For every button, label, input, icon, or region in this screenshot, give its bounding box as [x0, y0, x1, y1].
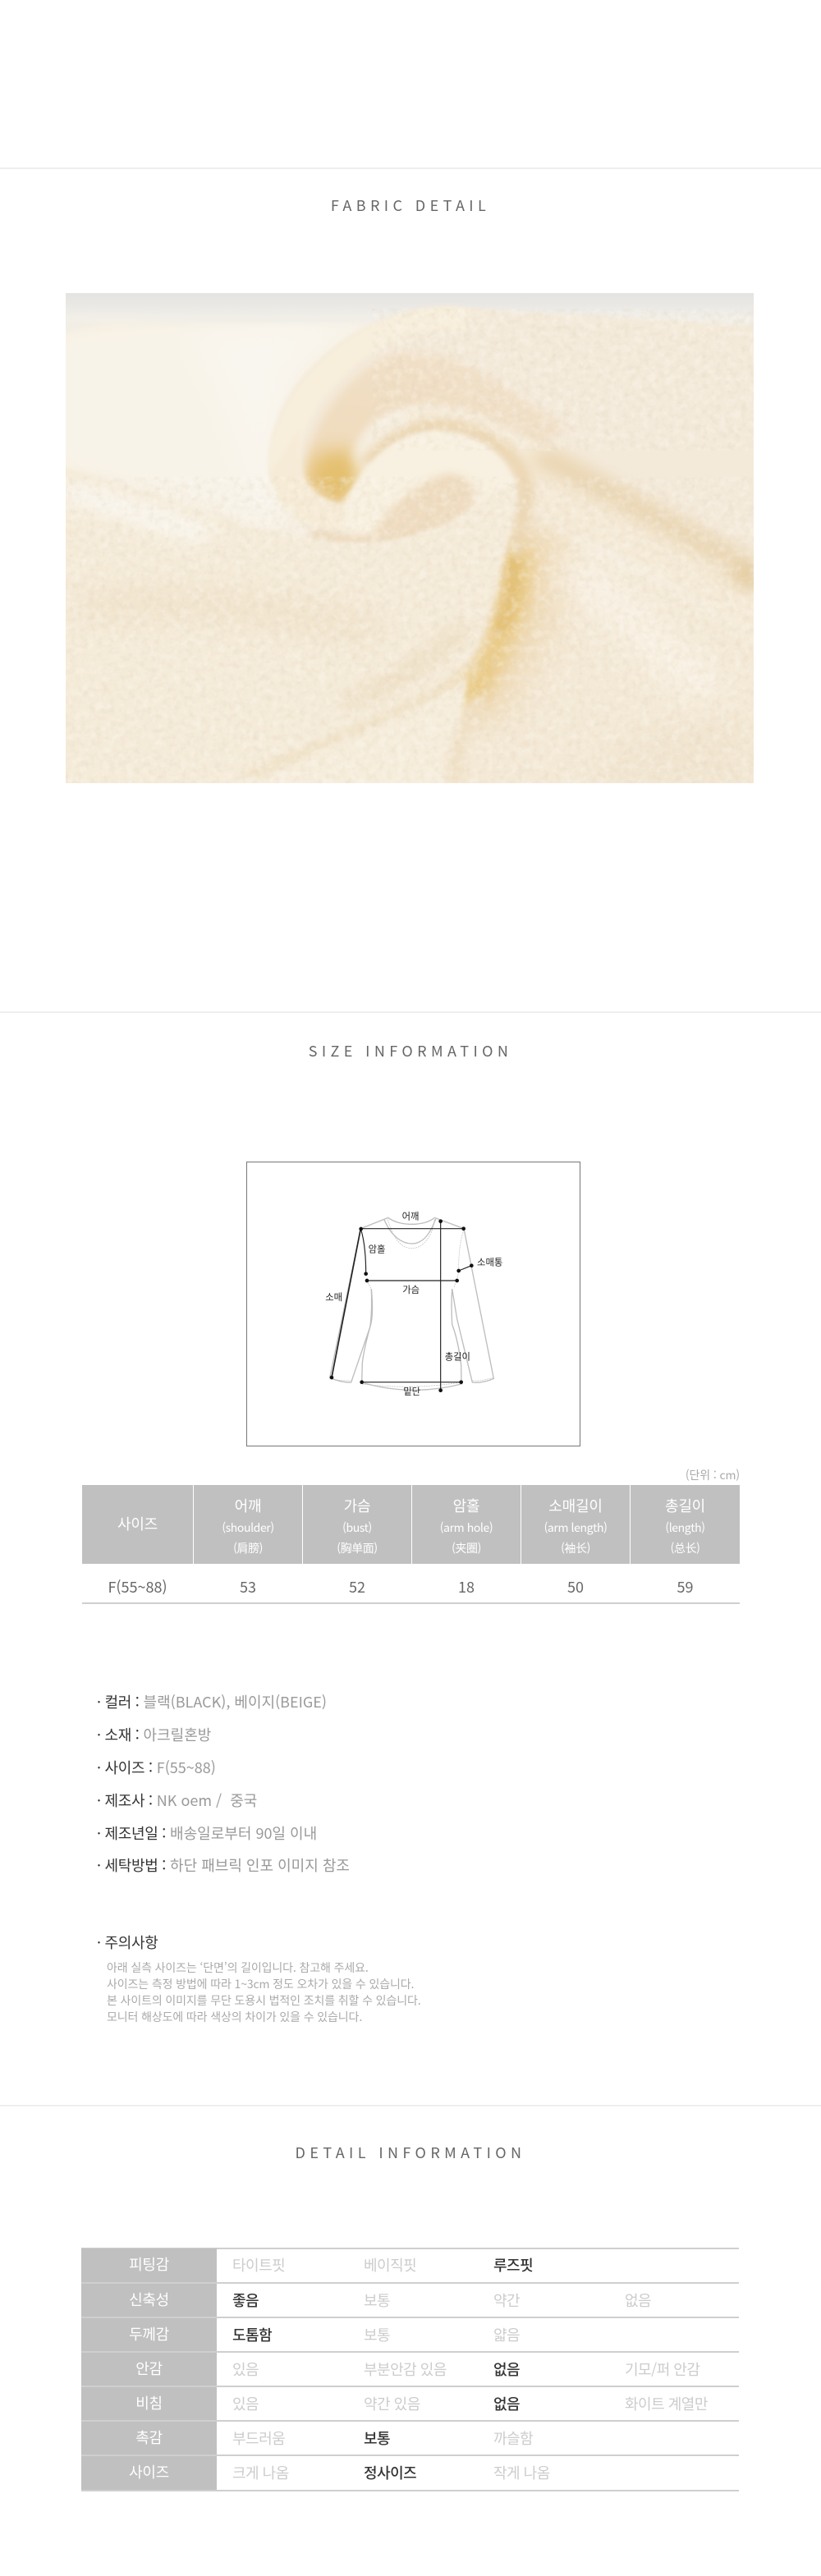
header: shoulder	[194, 1485, 302, 1564]
measurement lines	[332, 1222, 471, 1391]
measurement labels: 어깨	[402, 1210, 419, 1223]
product specification list: ·	[97, 1790, 101, 1811]
row: lining: 부분안감 있음	[364, 2358, 447, 2380]
header: length: (length)	[665, 1519, 705, 1536]
row: sizing: 사이즈	[129, 2461, 169, 2482]
cautions text	[107, 1960, 421, 2025]
header: arm hole: 암홀	[453, 1495, 479, 1516]
header: arm length: (arm length)	[544, 1519, 607, 1536]
shadow around the inner curl	[368, 424, 525, 556]
header: arm hole	[412, 1485, 521, 1564]
header: size: 사이즈	[117, 1513, 158, 1534]
header: arm hole: (夹圈)	[452, 1540, 481, 1556]
photo: swirled cream knit fabric	[66, 293, 754, 783]
header: size	[82, 1485, 193, 1564]
yellow core shadow	[466, 543, 519, 704]
product specification list: ·	[97, 1822, 101, 1844]
product specification list: 소재 : 아크릴혼방	[105, 1724, 211, 1745]
row: fit	[81, 2248, 533, 2282]
row: sheerness: 있음	[232, 2393, 259, 2414]
garment outline	[330, 1217, 493, 1390]
cautions text: 모니터 해상도에 따라 색상의 차이가 있을 수 있습니다.	[107, 2009, 362, 2025]
data row: F(55~88)	[108, 1576, 167, 1597]
row: stretch: 보통	[364, 2290, 390, 2311]
lower curl lip	[271, 473, 343, 528]
hollow of the swirl	[305, 352, 566, 506]
row: stretch	[81, 2284, 651, 2317]
heading: fabric detail: FABRIC DETAIL	[331, 195, 490, 216]
header: bust	[303, 1485, 411, 1564]
row: stretch: 신축성	[129, 2289, 169, 2310]
second band behind the curl	[417, 413, 754, 624]
row: touch: 촉감	[135, 2427, 163, 2448]
lower left big fold	[66, 470, 511, 663]
product specification list: 세탁방법 : 하단 패브릭 인포 이미지 참조	[105, 1854, 350, 1876]
measurement labels: 소매통	[477, 1256, 502, 1269]
row: sizing: 작게 나옴	[493, 2462, 550, 2483]
row: sizing: 정사이즈	[364, 2462, 416, 2483]
row: fit: 베이직핏	[364, 2254, 416, 2276]
product specification list: 제조사 : NK oem / 중국	[105, 1790, 257, 1811]
row: touch: 까슬함	[493, 2427, 533, 2449]
row: thickness: 도톰함	[232, 2324, 272, 2345]
row: touch: 보통	[364, 2427, 390, 2449]
row: sizing	[81, 2456, 550, 2490]
row: stretch: 없음	[625, 2290, 651, 2311]
measurement labels	[325, 1210, 502, 1398]
panel: size information section	[0, 1011, 821, 2025]
shadow beneath upper fold	[539, 454, 759, 575]
row: thickness: 두께감	[129, 2323, 169, 2345]
header: arm hole: (arm hole)	[440, 1519, 493, 1536]
row: stretch: 약간	[493, 2290, 520, 2311]
data row	[82, 1576, 740, 1604]
row: sheerness: 비침	[135, 2392, 163, 2413]
row: thickness	[81, 2318, 520, 2351]
heading: detail information: DETAIL INFORMATION	[296, 2142, 525, 2163]
header: bust: (胸单面)	[337, 1540, 378, 1556]
product specification list: 제조년일 : 배송일로부터 90일 이내	[105, 1822, 317, 1844]
panel: detail information section	[0, 2105, 821, 2491]
bottom centre fold	[440, 678, 469, 721]
data row: 53	[240, 1576, 256, 1597]
diagram frame	[246, 1162, 580, 1446]
back left blurred cloth	[67, 348, 71, 452]
row: fit: 타이트핏	[232, 2254, 285, 2276]
inner curl	[345, 430, 514, 524]
header: arm length: (袖长)	[561, 1540, 590, 1556]
data row: 52	[349, 1576, 365, 1597]
header: shoulder: 어깨	[235, 1495, 261, 1516]
row: sheerness: 없음	[493, 2393, 520, 2414]
product specification list: ·	[97, 1691, 101, 1712]
header: shoulder: (肩膀)	[233, 1540, 263, 1556]
wide peach shadow right of the front fold	[469, 529, 536, 721]
row: stretch: 좋음	[232, 2290, 259, 2311]
measurement labels: 암홀	[369, 1243, 385, 1256]
upper right fold	[470, 309, 754, 333]
product specification list	[97, 1691, 350, 1876]
header: arm length: 소매길이	[548, 1495, 603, 1516]
light diagonal patch on right lower fold	[571, 562, 713, 694]
measurement labels: 총길이	[445, 1350, 470, 1363]
row: lining: 기모/퍼 안감	[625, 2358, 699, 2380]
row: lining: 있음	[232, 2358, 259, 2380]
row: sizing: 크게 나옴	[232, 2462, 289, 2483]
cautions text: 본 사이트의 이미지를 무단 도용시 법적인 조치를 취할 수 있습니다.	[107, 1992, 421, 2009]
row: lining: 안감	[135, 2358, 163, 2379]
product specification list: ·	[97, 1854, 101, 1876]
row: thickness: 보통	[364, 2324, 390, 2345]
top grey backdrop	[66, 293, 754, 315]
row: thickness: 얇음	[493, 2324, 520, 2345]
row: fit: 피팅감	[129, 2253, 169, 2275]
size table	[82, 1467, 740, 1604]
data row: 59	[677, 1576, 693, 1597]
cautions heading: 주의사항	[105, 1932, 158, 1953]
measurement labels: 가슴	[402, 1283, 420, 1296]
cautions heading: ·	[97, 1932, 101, 1953]
product specification list: ·	[97, 1724, 101, 1745]
header: length: 총길이	[665, 1495, 705, 1516]
panel: fabric detail section	[0, 167, 821, 783]
row: fit: 루즈핏	[493, 2254, 533, 2276]
row: lining: 없음	[493, 2358, 520, 2380]
row: sheerness	[81, 2387, 708, 2420]
measurement labels: 소매	[325, 1290, 342, 1304]
heading: size information: SIZE INFORMATION	[309, 1040, 512, 1061]
data row: 18	[458, 1576, 475, 1597]
product specification list: ·	[97, 1757, 101, 1778]
detail attribute table	[81, 2248, 739, 2491]
measurement labels: 밑단	[403, 1385, 421, 1398]
row: touch: 부드러움	[232, 2427, 285, 2449]
product specification list: 사이즈 : F(55~88)	[105, 1757, 216, 1778]
unit note: (단위 : cm)	[686, 1467, 740, 1483]
header: shoulder: (shoulder)	[222, 1519, 274, 1536]
measurement dots	[330, 1219, 474, 1392]
header: arm length	[521, 1485, 630, 1564]
header: bust: 가슴	[344, 1495, 370, 1516]
row: sheerness: 약간 있음	[364, 2393, 420, 2414]
diagram: garment measurement points	[325, 1210, 502, 1398]
cautions text: 사이즈는 측정 방법에 따라 1~3cm 정도 오차가 있을 수 있습니다.	[107, 1976, 414, 1992]
row: touch	[81, 2422, 533, 2455]
header: length: (总长)	[671, 1540, 699, 1556]
product specification list: 컬러 : 블랙(BLACK), 베이지(BEIGE)	[105, 1691, 327, 1712]
lower right fold shading	[465, 583, 754, 783]
core shadow of the swirl	[317, 454, 358, 500]
row: lining	[81, 2353, 699, 2386]
header: bust: (bust)	[342, 1519, 372, 1536]
cautions note	[97, 1932, 421, 2025]
cautions text: 아래 실측 사이즈는 ‘단면’의 길이입니다. 참고해 주세요.	[107, 1960, 369, 1976]
data row: 50	[567, 1576, 584, 1597]
top rim of the swirl	[284, 319, 469, 474]
knit texture	[66, 477, 754, 783]
header: length	[631, 1485, 740, 1564]
row: sheerness: 화이트 계열만	[625, 2393, 708, 2414]
